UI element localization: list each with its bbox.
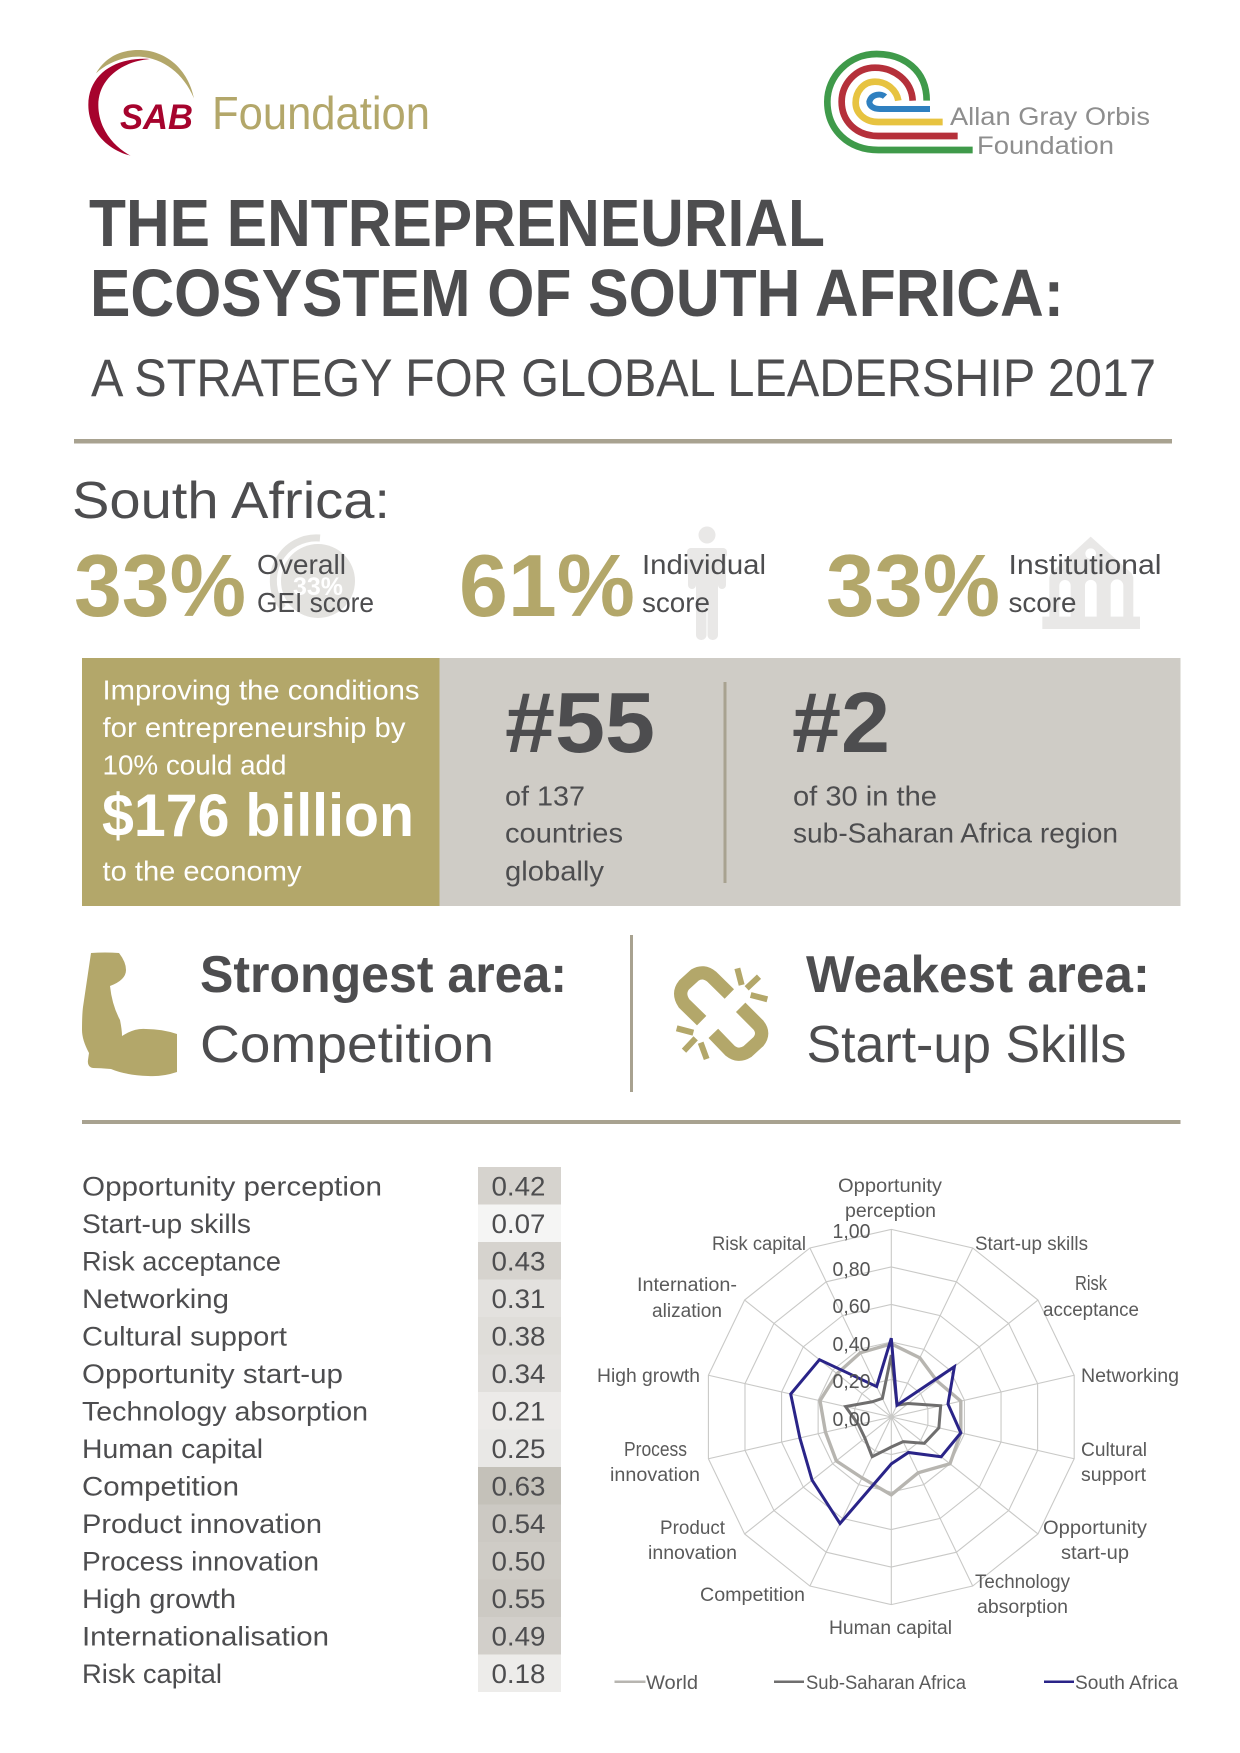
row: Human capital: Human capital [82, 1434, 263, 1464]
axis labels: Human capital [829, 1618, 952, 1639]
stat: institutional score [826, 536, 1162, 635]
row: Cultural support: 0.38 [492, 1322, 546, 1352]
axis labels: Process [624, 1439, 687, 1461]
row: Opportunity perception [82, 1167, 561, 1204]
row: Risk capital: Risk capital [82, 1659, 222, 1689]
row: Product innovation: Product innovation [82, 1509, 322, 1539]
row: High growth: 0.55 [492, 1584, 546, 1614]
panel: economy callout: 10% could add [102, 750, 286, 780]
scale labels: 0,20 [832, 1371, 870, 1393]
axis labels: acceptance [1043, 1300, 1139, 1321]
regional rank: #2 [792, 676, 890, 771]
panel: economy callout: to the economy [102, 856, 302, 886]
data series: World [820, 1344, 961, 1495]
panel: weakest area: Weakest area: [806, 946, 1150, 1004]
axis labels: Risk capital [712, 1234, 806, 1255]
row: Networking: 0.31 [492, 1284, 546, 1314]
panel: economy callout: Improving the conditions [102, 674, 420, 706]
axis labels: alization [652, 1301, 722, 1322]
global rank: of 137 [505, 780, 585, 812]
row: Competition: Competition [82, 1472, 239, 1502]
axis labels: Start-up skills [975, 1234, 1088, 1255]
axis labels: High growth [597, 1366, 700, 1387]
row: Competition: 0.63 [492, 1472, 546, 1502]
heading: South Africa: South Africa: [72, 472, 390, 530]
axis labels: perception [845, 1201, 936, 1222]
logo: Allan Gray Orbis Foundation: Allan Gray Orbis [950, 103, 1150, 131]
row: Risk capital [82, 1654, 561, 1692]
panel: weakest area [677, 946, 1150, 1074]
row: Risk acceptance: Risk acceptance [82, 1246, 281, 1276]
axis labels: innovation [648, 1543, 737, 1564]
row: High growth [82, 1580, 561, 1617]
stat: overall GEI score: GEI score [257, 587, 374, 618]
axis labels: Competition [700, 1585, 805, 1606]
global rank: globally [505, 856, 604, 886]
panel: economy callout: for entrepreneurship by [102, 712, 406, 743]
row: Human capital: 0.25 [492, 1434, 546, 1464]
row: Opportunity start-up: 0.34 [492, 1359, 546, 1389]
scale labels: 0,60 [832, 1296, 870, 1318]
row: Opportunity start-up [82, 1354, 561, 1392]
row: Risk capital: 0.18 [492, 1659, 546, 1689]
scale labels [832, 1221, 870, 1431]
stat: institutional score: Institutional [1008, 549, 1162, 580]
stat: institutional score: 33% [826, 536, 1000, 635]
data series: Sub-Saharan Africa [846, 1355, 941, 1457]
subtitle: A STRATEGY FOR GLOBAL LEADERSHIP 2017 [91, 349, 1156, 408]
axis labels: Technology [975, 1572, 1070, 1593]
row: High growth: High growth [82, 1584, 236, 1614]
axis labels: Networking [1081, 1366, 1179, 1387]
axis labels: absorption [977, 1597, 1068, 1618]
stat: overall GEI score [74, 536, 374, 635]
row: Risk acceptance [82, 1242, 561, 1280]
panel: economy callout [82, 658, 440, 906]
logo: SAB Foundation: SAB [120, 98, 193, 137]
row: Technology absorption: Technology absorption [82, 1396, 368, 1426]
icon: ghost ring gauge: 33% [293, 573, 343, 601]
row: Technology absorption: 0.21 [492, 1396, 546, 1426]
scale labels: 0,00 [832, 1409, 870, 1431]
row: Human capital [82, 1430, 561, 1467]
row: Process innovation: Process innovation [82, 1546, 319, 1576]
row: Start-up skills: Start-up skills [82, 1209, 251, 1239]
row: Technology absorption [82, 1392, 561, 1430]
icon: flexed arm [82, 952, 177, 1076]
axis labels: Internation- [637, 1275, 737, 1296]
row: Internationalisation: Internationalisation [82, 1622, 329, 1652]
row: Internationalisation [82, 1617, 561, 1654]
axis labels: Product [660, 1518, 726, 1539]
stat: individual score: score [642, 587, 710, 618]
row: Process innovation [82, 1542, 561, 1580]
axis labels: Risk [1075, 1273, 1108, 1295]
row: Start-up skills [82, 1204, 561, 1242]
axis labels: innovation [610, 1465, 700, 1486]
regional rank: of 30 in the [793, 780, 937, 812]
axis labels: Cultural [1081, 1440, 1147, 1461]
row: Cultural support [82, 1317, 561, 1354]
row: Product innovation [82, 1504, 561, 1542]
row: Cultural support: Cultural support [82, 1322, 288, 1352]
icon: ghost person [687, 526, 727, 640]
row: Networking: Networking [82, 1284, 229, 1314]
axis labels: start-up [1061, 1543, 1129, 1564]
panel: strongest area: Strongest area: [200, 946, 567, 1004]
stat: individual score: 61% [459, 536, 635, 635]
row: Product innovation: 0.54 [492, 1509, 546, 1539]
logo: SAB Foundation: Foundation [212, 87, 430, 139]
title: THE ENTREPRENEURIAL [89, 186, 825, 261]
icon: broken chain [677, 968, 767, 1059]
global rank: #55 [505, 676, 655, 771]
row: Process innovation: 0.50 [492, 1546, 546, 1576]
row: Internationalisation: 0.49 [492, 1622, 546, 1652]
scale labels: 0,80 [832, 1259, 870, 1281]
scale labels: 1,00 [832, 1221, 870, 1243]
row: Opportunity start-up: Opportunity start-up [82, 1359, 343, 1389]
panel: economy callout: $176 billion [102, 782, 414, 849]
regional rank [792, 676, 1118, 848]
row: Risk acceptance: 0.43 [492, 1246, 546, 1276]
data series: South Africa [791, 1338, 961, 1523]
chart grid [708, 1229, 1074, 1605]
stat: overall GEI score: 33% [74, 536, 246, 635]
panel: weakest area: Start-up Skills [806, 1016, 1126, 1074]
stat: overall GEI score: Overall [257, 549, 346, 580]
axis labels: support [1081, 1465, 1147, 1486]
axis labels: Opportunity [1043, 1518, 1148, 1539]
title [89, 186, 1064, 331]
row: Competition [82, 1467, 561, 1504]
global rank [505, 676, 655, 886]
panel: strongest area [82, 946, 567, 1076]
row: Opportunity perception: Opportunity perception [82, 1172, 382, 1202]
row: Start-up skills: 0.07 [492, 1209, 546, 1239]
global rank: countries [505, 818, 623, 848]
logo: Allan Gray Orbis Foundation [827, 54, 1150, 160]
panel: rankings background [82, 658, 1180, 906]
row: Networking [82, 1280, 561, 1317]
axis labels: Opportunity [838, 1176, 943, 1197]
chart legend: Sub-Saharan Africa [806, 1673, 966, 1694]
logo: Allan Gray Orbis Foundation: Foundation [977, 132, 1114, 160]
chart legend: South Africa [1075, 1673, 1178, 1694]
axis labels [597, 1176, 1179, 1639]
stat: institutional score: score [1008, 587, 1076, 618]
chart legend [614, 1673, 1178, 1694]
radar chart [597, 1176, 1179, 1694]
logo: SAB Foundation [88, 50, 430, 156]
stat: individual score: Individual [642, 549, 766, 580]
row: Opportunity perception: 0.42 [492, 1172, 546, 1202]
icon: ghost bank building [1042, 537, 1140, 629]
panel: strongest area: Competition [200, 1016, 494, 1074]
chart legend: World [646, 1673, 698, 1694]
title: ECOSYSTEM OF SOUTH AFRICA: [90, 256, 1064, 331]
scale labels: 0,40 [832, 1334, 870, 1356]
icon: ghost ring gauge [273, 538, 355, 618]
score table [82, 1167, 561, 1692]
stat: individual score [459, 526, 766, 640]
regional rank: sub-Saharan Africa region [793, 818, 1118, 848]
